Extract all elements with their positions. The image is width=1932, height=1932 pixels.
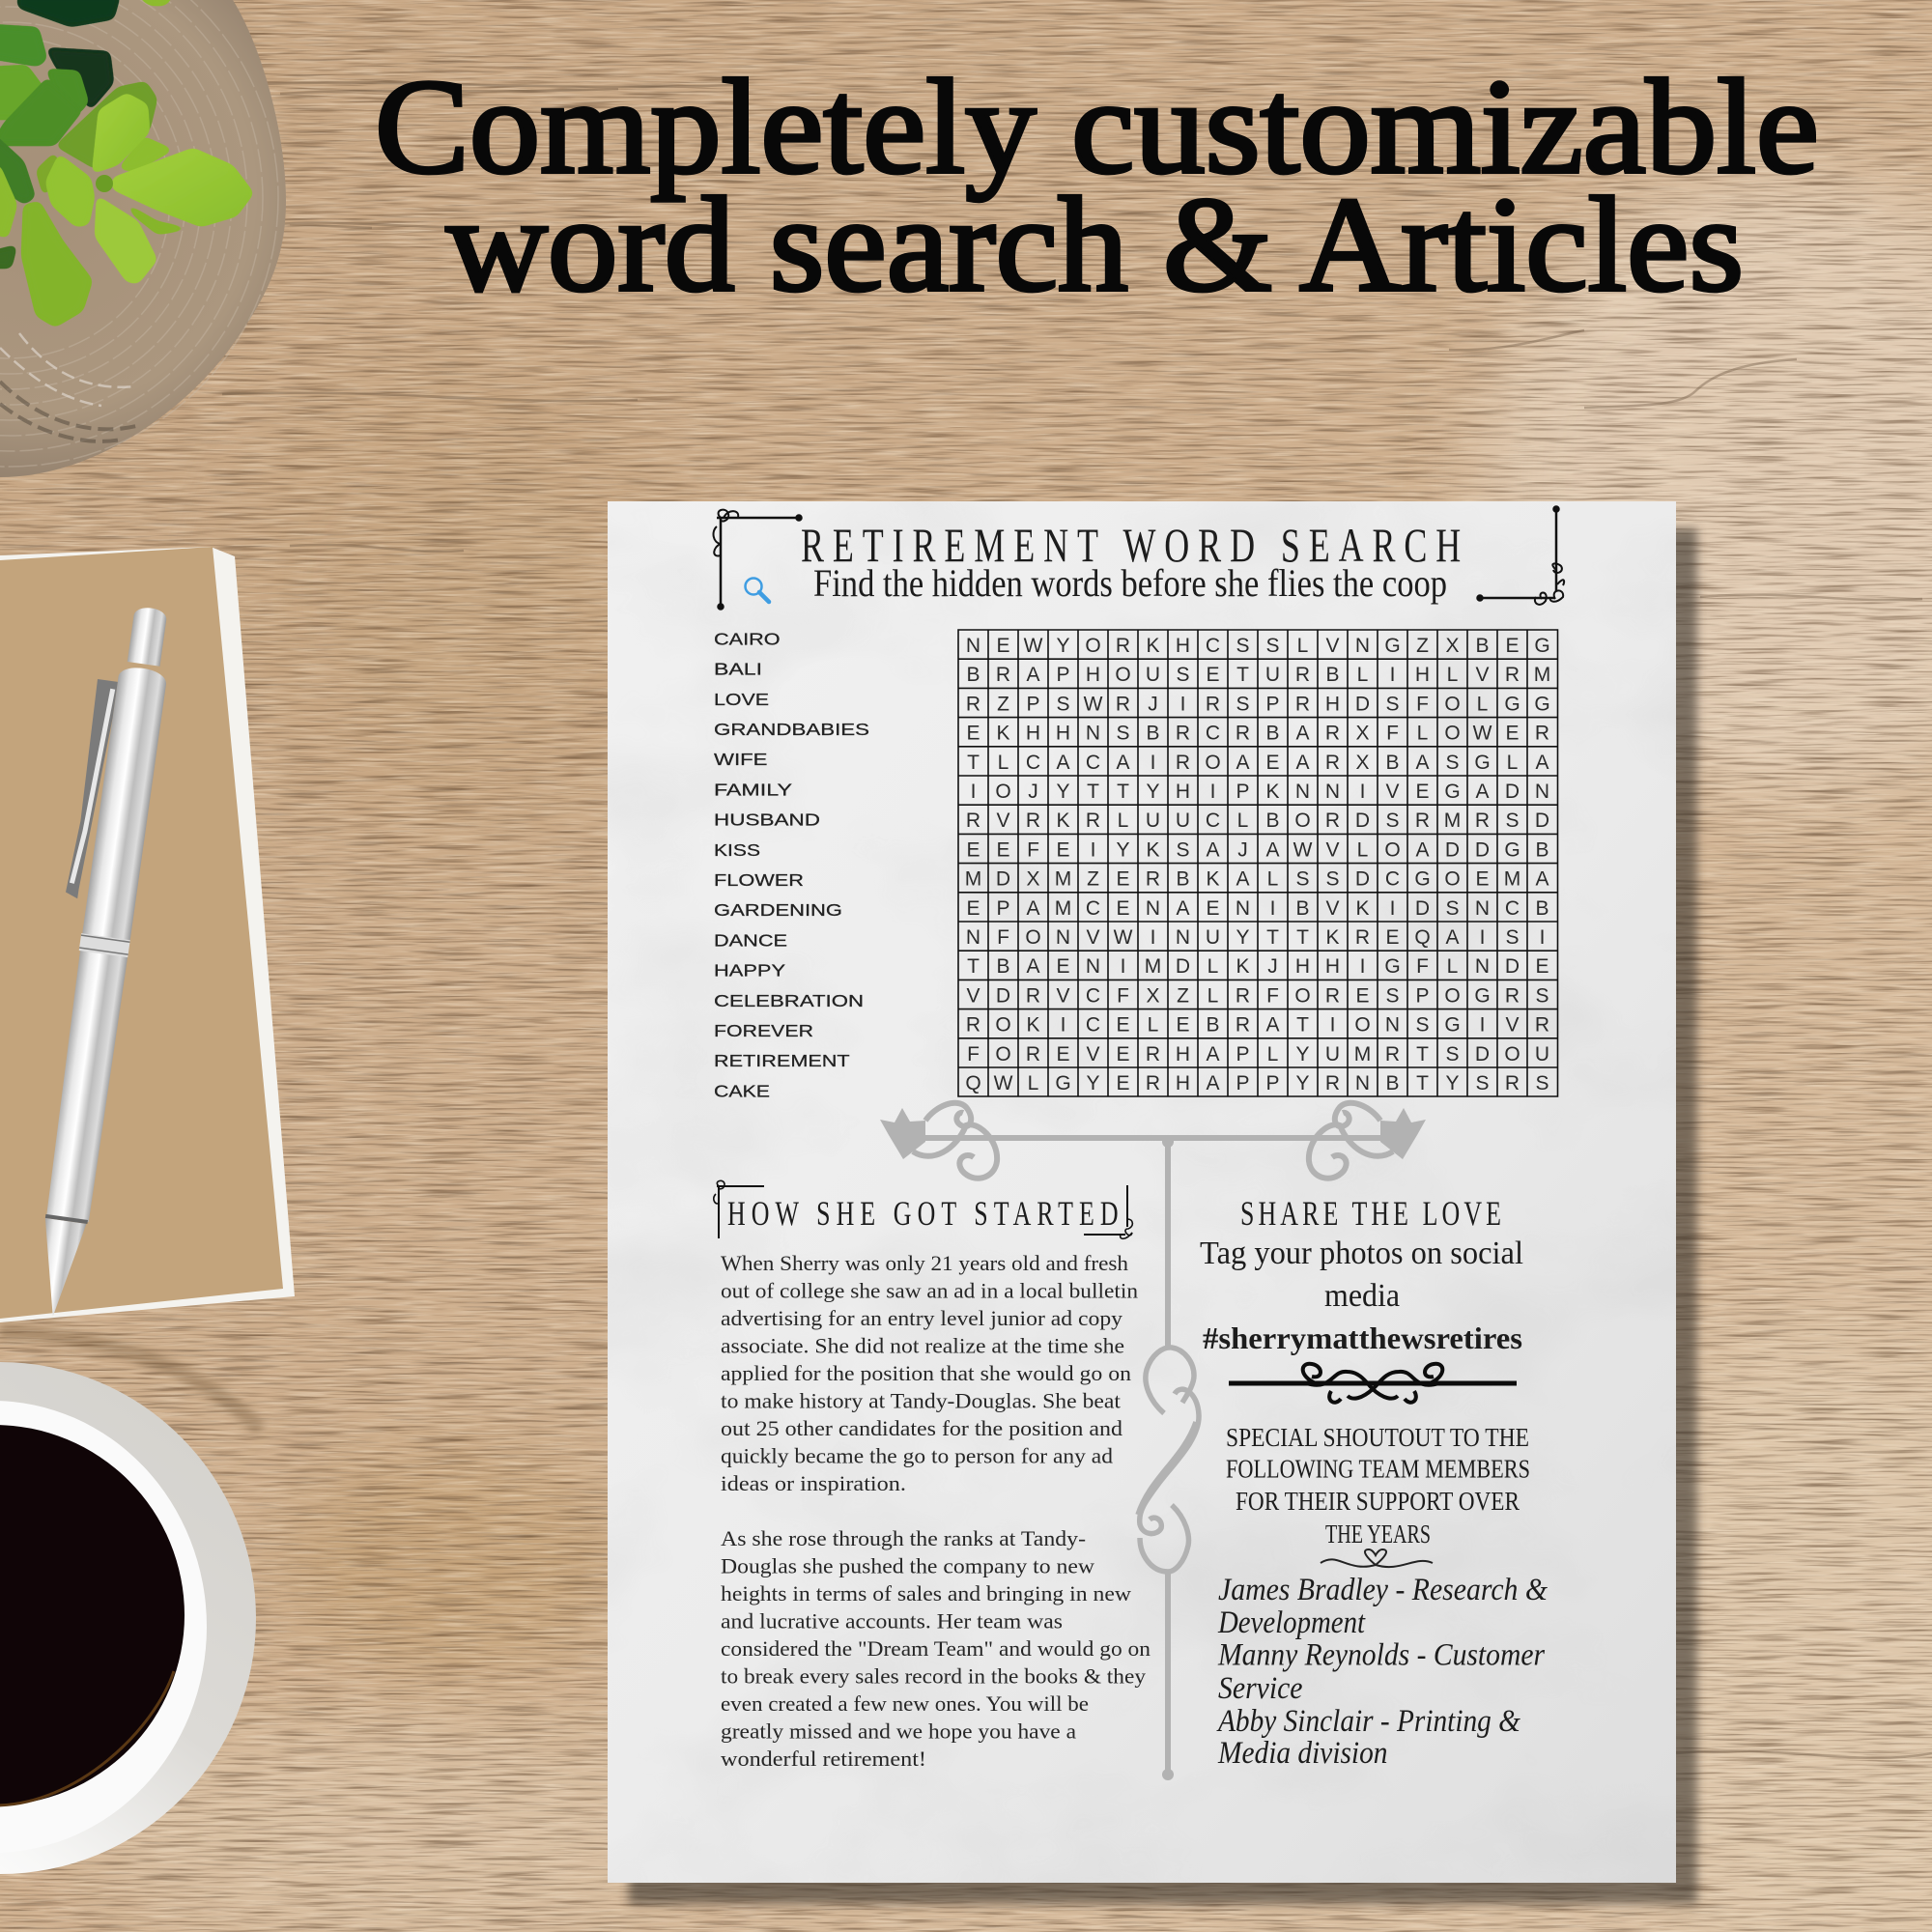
word list: CELEBRATION — [714, 991, 864, 1010]
right scroll — [1309, 1103, 1426, 1179]
coffee cup — [0, 1362, 256, 1874]
team member names: Manny Reynolds - Customer — [1217, 1638, 1545, 1673]
article text: wonderful retirement! — [721, 1747, 926, 1771]
article text: even created a few new ones. You will be — [721, 1691, 1089, 1716]
how she got started panel — [714, 1180, 1151, 1771]
notebook — [0, 547, 295, 1322]
team member names: James Bradley - Research & — [1218, 1573, 1548, 1607]
article text: and lucrative accounts. Her team was — [721, 1609, 1063, 1633]
paper sheet — [608, 501, 1676, 1883]
article text: ideas or inspiration. — [721, 1471, 906, 1495]
plant leaves — [0, 0, 254, 327]
article text: to break every sales record in the books & they — [721, 1663, 1147, 1689]
word search grid: FOREVERHAPLYUMRTSDOU — [967, 1043, 1549, 1065]
article text: Douglas she pushed the company to new — [721, 1553, 1095, 1578]
article text: considered the "Dream Team" and would go on — [721, 1636, 1151, 1661]
share instructions: Tag your photos on social — [1200, 1236, 1523, 1271]
centre S scroll — [1138, 1348, 1199, 1572]
word list: FLOWER — [714, 870, 804, 890]
shoutout heading — [1226, 1423, 1530, 1548]
team member names — [1216, 1573, 1548, 1771]
word search grid: RVRKRLUUCLBORDSRMRSD — [966, 810, 1549, 832]
team member names: Media division — [1217, 1736, 1387, 1771]
word list: CAKE — [714, 1081, 770, 1100]
corner ornament top left — [714, 510, 802, 609]
word list — [714, 629, 869, 1100]
word search grid: EKHHNSBRCRBARXFLOWER — [966, 723, 1549, 745]
word list: KISS — [714, 840, 760, 860]
article text: As she rose through the ranks at Tandy- — [721, 1526, 1086, 1550]
corner ornament bottom right — [1478, 506, 1564, 605]
article text — [721, 1251, 1151, 1771]
word search grid: TBAENIMDLKJHHIGFLNDE — [967, 955, 1549, 978]
word search grid — [958, 630, 1557, 1096]
article text: quickly became the go to person for any ad — [721, 1443, 1113, 1468]
word search grid: EEFEIYKSAJAWVLOADDGB — [966, 838, 1549, 861]
shoutout heading: SPECIAL SHOUTOUT TO THE — [1226, 1423, 1529, 1452]
word list: LOVE — [714, 690, 769, 709]
share heading: SHARE THE LOVE — [1240, 1194, 1501, 1233]
team member names: Development — [1217, 1605, 1366, 1640]
share the love panel — [1200, 1194, 1548, 1771]
title — [375, 52, 1819, 320]
word search grid: NFONVWINUYTTKREQAISI — [966, 926, 1545, 949]
pen — [7, 602, 177, 1320]
word search grid: BRAPHOUSETURBLIHLVRM — [966, 664, 1550, 686]
black scroll divider — [1229, 1364, 1517, 1403]
shoutout heading: THE YEARS — [1325, 1520, 1431, 1548]
article text: out 25 other candidates for the position and — [721, 1416, 1122, 1440]
article text: advertising for an entry level junior ad copy — [721, 1306, 1123, 1330]
word list: GARDENING — [714, 900, 842, 920]
article text: greatly missed and we hope you have a — [721, 1719, 1076, 1743]
word list: RETIREMENT — [714, 1051, 850, 1070]
word search grid: QWLGYERHAPPYRNBTYSRS — [965, 1072, 1549, 1094]
word list: FOREVER — [714, 1021, 813, 1040]
word search grid: IOJYTTYHIPKNNIVEGADN — [971, 781, 1549, 803]
article text: When Sherry was only 21 years old and fresh — [721, 1251, 1128, 1275]
grey flourish divider — [880, 1103, 1426, 1780]
word list: WIFE — [714, 750, 767, 769]
article heading: HOW SHE GOT STARTED — [727, 1194, 1119, 1233]
word search subtitle: Find the hidden words before she flies the coop — [813, 561, 1447, 605]
word list: CAIRO — [714, 629, 781, 648]
word search grid: EPAMCENAENIBVKIDSNCB — [966, 897, 1549, 920]
glass vase — [0, 0, 286, 477]
word list: BALI — [714, 660, 762, 679]
team member names: Abby Sinclair - Printing & — [1216, 1704, 1520, 1739]
title: Completely customizable — [375, 52, 1819, 202]
article text: associate. She did not realize at the time she — [721, 1333, 1124, 1358]
word list: DANCE — [714, 930, 787, 950]
left scroll — [880, 1103, 997, 1179]
shoutout heading: FOR THEIR SUPPORT OVER — [1236, 1487, 1520, 1516]
paper shadow — [629, 528, 1697, 1904]
word list: HUSBAND — [714, 810, 820, 830]
heading bracket — [714, 1180, 1132, 1238]
hashtag: #sherrymatthewsretires — [1203, 1321, 1522, 1355]
article text: applied for the position that she would go on — [721, 1361, 1131, 1385]
word list: FAMILY — [714, 780, 792, 799]
heart divider — [1321, 1549, 1433, 1567]
title: word search & Articles — [446, 170, 1744, 320]
shoutout heading: FOLLOWING TEAM MEMBERS — [1226, 1455, 1530, 1484]
share instructions — [1200, 1236, 1523, 1314]
word search title: RETIREMENT WORD SEARCH — [801, 519, 1461, 572]
article text: out of college she saw an ad in a local bulletin — [721, 1279, 1138, 1302]
team member names: Service — [1218, 1671, 1302, 1706]
word search grid: MDXMZERBKALSSDCGOEMA — [965, 868, 1549, 891]
word list: GRANDBABIES — [714, 720, 869, 739]
icon: magnifier — [746, 578, 769, 602]
word search heading — [714, 506, 1564, 609]
word search grid: ROKICELEBRATIONSGIVR — [966, 1014, 1549, 1037]
article text: heights in terms of sales and bringing in new — [721, 1581, 1132, 1605]
word search grid: RZPSWRJIRSPRHDSFOLGG — [966, 693, 1550, 715]
share instructions: media — [1324, 1278, 1400, 1314]
article text: to make history at Tandy-Douglas. She beat — [721, 1389, 1122, 1412]
word list: HAPPY — [714, 961, 785, 980]
word search grid: NEWYORKHCSSLVNGZXBEG — [966, 635, 1550, 657]
word search grid: VDRVCFXZLRFORESPOGRS — [966, 984, 1549, 1007]
word search grid: TLCACAIROAEARXBASGLA — [967, 752, 1549, 774]
